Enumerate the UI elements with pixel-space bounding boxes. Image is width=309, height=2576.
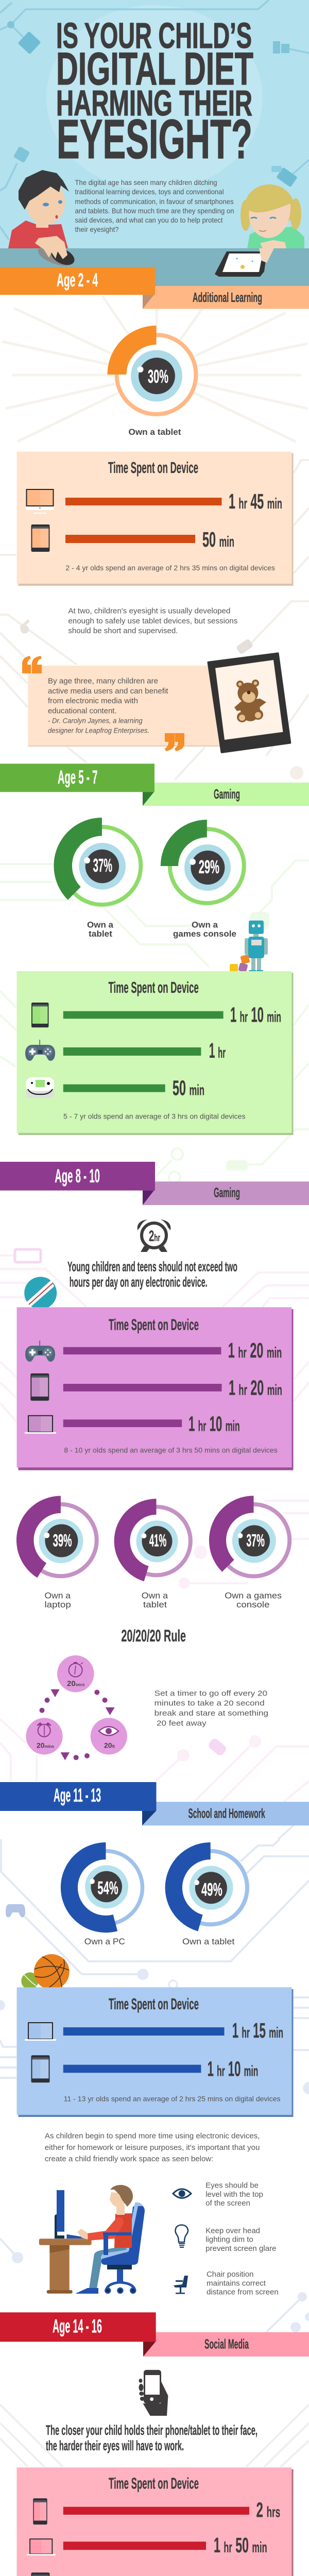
- icon: opening quote marks: [22, 656, 42, 673]
- panel: time spent on device age 8-10: 8 - 10 yr olds spend an average of 3 hrs 50 mins on digital devices: [64, 1446, 278, 1454]
- panel: quote: - Dr. Carolyn Jaynes, a learning: [48, 717, 143, 724]
- text: introduction: The digital age has seen many children ditching: [75, 178, 217, 187]
- text: 20/20/20 explanation: 20 feet away: [157, 1719, 207, 1727]
- panel: time spent on device age 11-13: 11 - 13 yr olds spend an average of 2 hrs 25 mins on digital devices: [64, 2094, 281, 2103]
- panel: time spent on device age 2-4: 1 hr 45 min: [229, 489, 282, 513]
- icon: light bulb: [175, 2225, 188, 2247]
- ribbon: age 11-13: Age 11 - 13: [54, 1785, 101, 1806]
- list: work space tips: maintains correct: [207, 2279, 266, 2287]
- list: work space tips: [173, 2181, 279, 2296]
- text: eyesight development: At two, children's eyesight is usually developed: [68, 607, 230, 616]
- ribbon: age 8-10: Gaming: [214, 1184, 240, 1200]
- ribbon: age 5-7: [0, 764, 309, 806]
- panel: time spent on device age 11-13: Time Spent on Device: [109, 1995, 199, 2013]
- ribbon: age 2-4: [0, 267, 309, 309]
- labels: ownership age 5-7: games console: [173, 929, 236, 939]
- chart: own a PC 54%: [61, 1842, 142, 1933]
- table: [0, 248, 309, 286]
- chart: own a PC 54%: 54%: [97, 1878, 118, 1899]
- text: two hours advice: [67, 1259, 237, 1290]
- ribbon: age 5-7: Age 5 - 7: [58, 767, 97, 788]
- panel: time spent on device age 14-16: 2 hrs: [256, 2498, 280, 2522]
- labels: ownership age 8-10: Own a: [44, 1591, 71, 1601]
- text: phone distance advice: [46, 2422, 258, 2453]
- icon: hand holding phone: [139, 2370, 168, 2416]
- labels: ownership age 5-7: tablet: [89, 929, 112, 939]
- icon: phone: [33, 2498, 47, 2524]
- labels: ownership age 8-10: [44, 1591, 282, 1609]
- heading: 20/20/20 rule: 20/20/20 Rule: [121, 1626, 186, 1645]
- chart: own a tablet 49%: [165, 1842, 247, 1931]
- panel: time spent on device age 14-16: Time Spent on Device: [109, 2475, 199, 2493]
- icon: tablet: [31, 1003, 48, 1027]
- text: introduction: said devices, and what can you do to help protect: [75, 216, 223, 224]
- icon: stopwatch 20 secs: 20secs: [67, 1680, 85, 1688]
- text: introduction: methods of communication, in favour of smartphones: [75, 197, 234, 206]
- icon: monitor: [26, 489, 54, 514]
- panel: time spent on device age 5-7: 5 - 7 yr olds spend an average of 3 hrs on digital devices: [63, 1112, 245, 1121]
- panel: time spent on device age 8-10: 1 hr 20 min: [229, 1376, 282, 1399]
- leg: [89, 2245, 129, 2289]
- panel: header: [0, 0, 309, 286]
- chart: own a tablet 37%: 37%: [93, 855, 112, 876]
- label: own a tablet: Own a tablet: [129, 427, 181, 437]
- icon: alarm clock 2hr: [138, 1219, 170, 1252]
- text: child friendly work space: either for homework or leisure purposes, it's important that you: [45, 2143, 260, 2152]
- list: work space tips: distance from screen: [207, 2287, 279, 2296]
- list: work space tips: Eyes should be: [205, 2181, 259, 2190]
- labels: ownership age 8-10: Own a: [142, 1591, 168, 1601]
- chair: [101, 2205, 145, 2265]
- chart: own a laptop 39%: 39%: [53, 1531, 72, 1551]
- panel: time spent on device age 11-13: 1 hr 10 min: [208, 2057, 258, 2080]
- ribbon: age 11-13: [0, 1782, 309, 1825]
- illustration: girl with tablet: [215, 184, 304, 277]
- chart: own a laptop 39%: [16, 1496, 97, 1578]
- chart: own a games console 37%: [209, 1496, 289, 1577]
- panel: time spent on device age 2-4: 2 - 4 yr olds spend an average of 2 hrs 35 mins on digital devices: [65, 564, 275, 572]
- labels: ownership age 5-7: [87, 920, 236, 939]
- icon: tablet: [31, 2572, 49, 2576]
- illustration: robot and toy blocks: [230, 912, 269, 973]
- ribbon: age 5-7: Gaming: [214, 786, 240, 802]
- ribbon: age 14-16: Social Media: [204, 2336, 249, 2351]
- icon: laptop: [25, 1415, 56, 1434]
- labels: ownership age 8-10: laptop: [44, 1600, 71, 1609]
- icon: gamepad: [25, 1040, 55, 1061]
- icon: chair: [174, 2276, 188, 2294]
- chart: own a tablet 49%: 49%: [201, 1879, 222, 1900]
- chart: own a games console 29%: 29%: [199, 856, 219, 877]
- ribbon: age 8-10: [0, 1162, 309, 1205]
- illustration: boy with mouse: [8, 170, 77, 269]
- labels: ownership age 5-7: Own a: [192, 920, 218, 930]
- icon: eye 20 ft: 20ft: [104, 1741, 115, 1749]
- icon: stopwatch 20 secs: [57, 1655, 94, 1692]
- chart: own a games console 37%: 37%: [246, 1531, 265, 1551]
- panel: quote: By age three, many children are: [48, 677, 158, 686]
- list: work space tips: level with the top: [205, 2190, 263, 2199]
- text: eyesight development: should be short and supervised.: [68, 626, 178, 635]
- icon: laptop: [27, 2538, 56, 2555]
- panel: time spent on device age 8-10: [16, 1307, 294, 1470]
- panel: quote: from electronic media with: [48, 697, 138, 705]
- text: 20/20/20 explanation: Set a timer to go off every 20: [154, 1689, 267, 1698]
- ribbon: age 14-16: Age 14 - 16: [53, 2315, 102, 2336]
- icon: alarm clock 2hr: 2hr: [149, 1228, 160, 1245]
- ribbon: age 14-16: [0, 2312, 309, 2357]
- icon: laptop: [25, 2022, 56, 2041]
- icon: handheld console: [26, 1077, 54, 1098]
- labels: ownership age 8-10: console: [236, 1600, 270, 1609]
- list: work space tips: of the screen: [205, 2199, 250, 2208]
- labels: ownership age 8-10: tablet: [143, 1600, 167, 1609]
- text: introduction: their eyesight?: [75, 225, 119, 233]
- text: introduction: [75, 178, 234, 233]
- ribbon: age 8-10: Age 8 - 10: [55, 1165, 100, 1187]
- panel: time spent on device age 2-4: Time Spent on Device: [108, 459, 198, 477]
- panel: quote: active media users and can benefit: [48, 687, 168, 696]
- icon: toy ball: [24, 1277, 57, 1309]
- panel: time spent on device age 14-16: [16, 2467, 294, 2576]
- heading: title: [56, 15, 253, 170]
- panel: time spent on device age 14-16: 1 hr 50 min: [214, 2533, 267, 2557]
- chart: own a tablet 30%: [107, 326, 196, 414]
- chart: own a tablet 41%: 41%: [149, 1531, 166, 1551]
- icon: tennis ball and basketball: [21, 1954, 70, 1990]
- panel: time spent on device age 8-10: 1 hr 20 min: [228, 1338, 282, 1362]
- head: [116, 2205, 125, 2215]
- text: eyesight development: [68, 607, 237, 635]
- list: work space tips: Chair position: [207, 2270, 253, 2279]
- icon: gamepad: [25, 1341, 55, 1362]
- text: child friendly work space: create a child friendly work space as seen below:: [45, 2155, 214, 2163]
- chart: own a tablet 30%: 30%: [148, 366, 168, 387]
- panel: time spent on device age 8-10: Time Spent on Device: [109, 1316, 199, 1334]
- icon: alarm clock 20 mins: 20mins: [37, 1741, 55, 1749]
- panel: time spent on device age 5-7: [16, 971, 294, 1135]
- list: work space tips: lighting dim to: [205, 2235, 253, 2244]
- chart: own a tablet 37%: [54, 818, 141, 905]
- list: work space tips: prevent screen glare: [205, 2244, 276, 2253]
- labels: ownership age 11-13: Own a tablet: [182, 1937, 235, 1946]
- text: introduction: and tablets. But how much time are they spending on: [75, 207, 234, 215]
- panel: time spent on device age 11-13: [16, 1987, 294, 2117]
- text: eyesight development: enough to safely use tablet devices, but sessions: [68, 617, 237, 625]
- text: 20/20/20 explanation: break and stare at something: [154, 1709, 268, 1718]
- icon: tablet: [30, 1374, 49, 1401]
- diagram: 20/20/20 cycle: [26, 1655, 127, 1760]
- text: child friendly work space: [45, 2132, 260, 2163]
- icon: closing quote marks: [165, 733, 184, 751]
- labels: ownership age 11-13: Own a PC: [84, 1937, 125, 1946]
- panel: time spent on device age 5-7: 1 hr: [209, 1039, 226, 1062]
- panel: time spent on device age 8-10: 1 hr 10 min: [188, 1412, 240, 1435]
- panel: time spent on device age 5-7: 1 hr 10 min: [230, 1003, 281, 1026]
- panel: quote: designer for Leapfrog Enterprises.: [48, 726, 149, 734]
- icon: tablet with teddy bear: [208, 653, 290, 752]
- torso: [114, 2213, 132, 2248]
- panel: section age 5-7: [0, 764, 309, 1183]
- chart: own a tablet 41%: [114, 1499, 191, 1581]
- labels: ownership age 11-13: [84, 1937, 235, 1946]
- panel: time spent on device age 2-4: [16, 452, 294, 586]
- panel: quote: educational content.: [48, 706, 117, 715]
- text: child friendly work space: As children begin to spend more time using electronic devices,: [45, 2132, 260, 2141]
- panel: time spent on device age 11-13: 1 hr 15 min: [232, 2019, 283, 2042]
- panel: time spent on device age 5-7: Time Spent on Device: [108, 978, 199, 996]
- panel: time spent on device age 5-7: 50 min: [173, 1076, 204, 1100]
- ribbon: age 2-4: Age 2 - 4: [57, 269, 98, 291]
- text: introduction: traditional learning devices, toys and conventional: [75, 188, 224, 196]
- labels: ownership age 8-10: Own a games: [225, 1591, 282, 1601]
- panel: section age 2-4: [0, 267, 309, 779]
- text: 20/20/20 explanation: [154, 1689, 268, 1727]
- panel: section age 14-16: [0, 2312, 309, 2576]
- panel: section age 8-10: [0, 1162, 309, 1802]
- text: 20/20/20 explanation: minutes to take a 20 second: [154, 1699, 265, 1708]
- panel: quote: [22, 656, 224, 751]
- icon: tablet: [31, 2055, 49, 2082]
- icon: eye: [173, 2189, 191, 2198]
- illustration: child at desk: [39, 2185, 145, 2294]
- labels: ownership age 5-7: Own a: [87, 920, 114, 930]
- panel: section age 11-13: [0, 1782, 309, 2332]
- panel: time spent on device age 2-4: 50 min: [202, 528, 234, 551]
- icon: eye 20 ft: [91, 1718, 127, 1755]
- chart: own a games console 29%: [161, 820, 244, 903]
- icon: phone: [31, 524, 49, 552]
- list: work space tips: Keep over head: [205, 2226, 260, 2235]
- icon: alarm clock 20 mins: [26, 1718, 63, 1755]
- text: phone distance advice: the harder their eyes will have to work.: [46, 2438, 184, 2453]
